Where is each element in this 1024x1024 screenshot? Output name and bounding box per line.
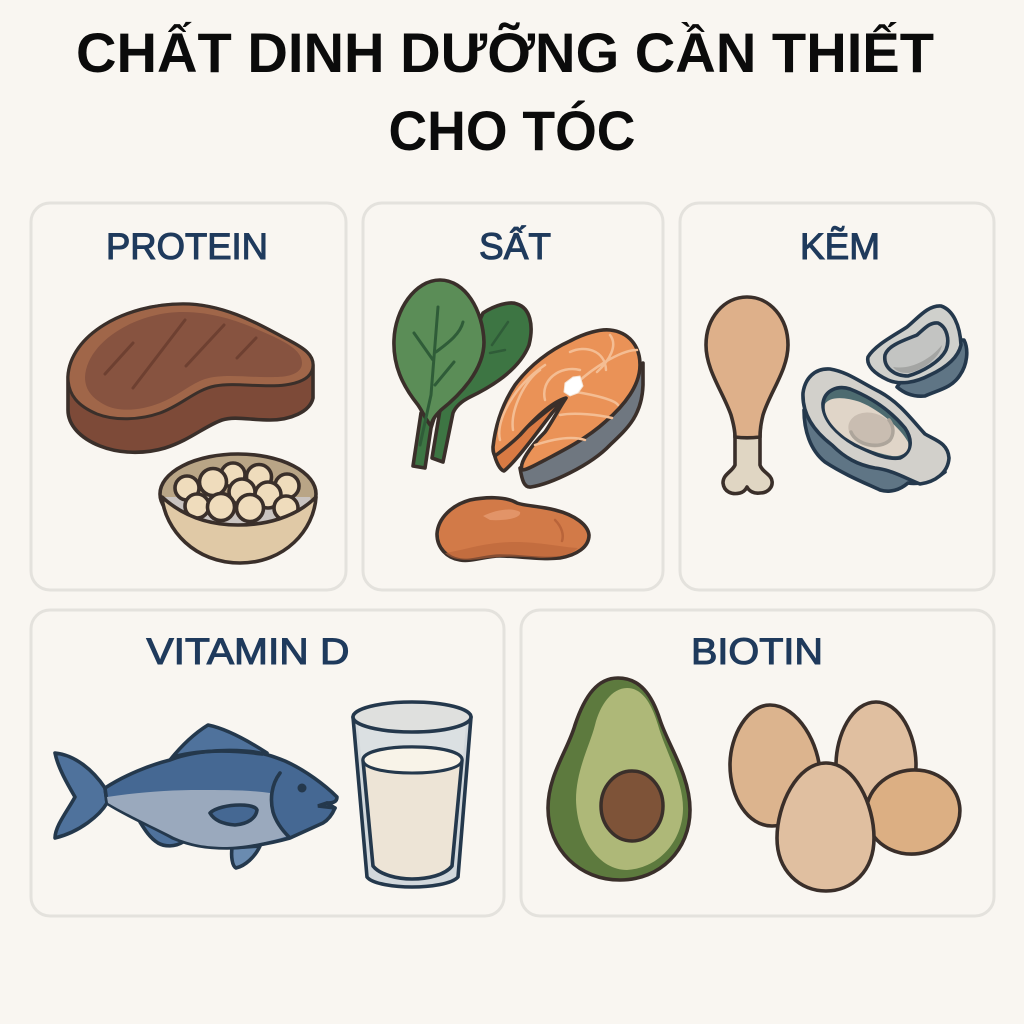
heading: kẽm: KẼM <box>800 226 880 267</box>
panel: sắt <box>363 203 663 590</box>
icon: bowl of beans <box>160 454 316 563</box>
icon: liver <box>437 498 589 560</box>
icon: avocado <box>548 678 690 880</box>
icon: glass of milk <box>353 702 471 887</box>
title: CHẤT DINH DƯỠNG CẦN THIẾT <box>76 21 934 84</box>
icon: salmon steak <box>493 330 643 487</box>
icon: spinach <box>394 280 531 468</box>
icon: fish <box>55 725 337 868</box>
panel: vitamin D <box>31 610 504 916</box>
icon: steak <box>68 304 313 452</box>
title: CHO TÓC <box>388 99 636 162</box>
icon: chicken drumstick <box>706 297 788 494</box>
icon: eggs <box>730 702 965 891</box>
panel: protein <box>31 203 346 590</box>
icon: oysters <box>803 306 967 491</box>
heading: vitamin D: VITAMIN D <box>146 631 350 672</box>
heading: sắt: SẤT <box>479 226 551 267</box>
panel: kẽm <box>680 203 994 590</box>
title <box>76 21 934 162</box>
heading: protein: PROTEIN <box>106 226 268 267</box>
panel: biotin <box>521 610 994 916</box>
heading: biotin: BIOTIN <box>691 631 823 672</box>
